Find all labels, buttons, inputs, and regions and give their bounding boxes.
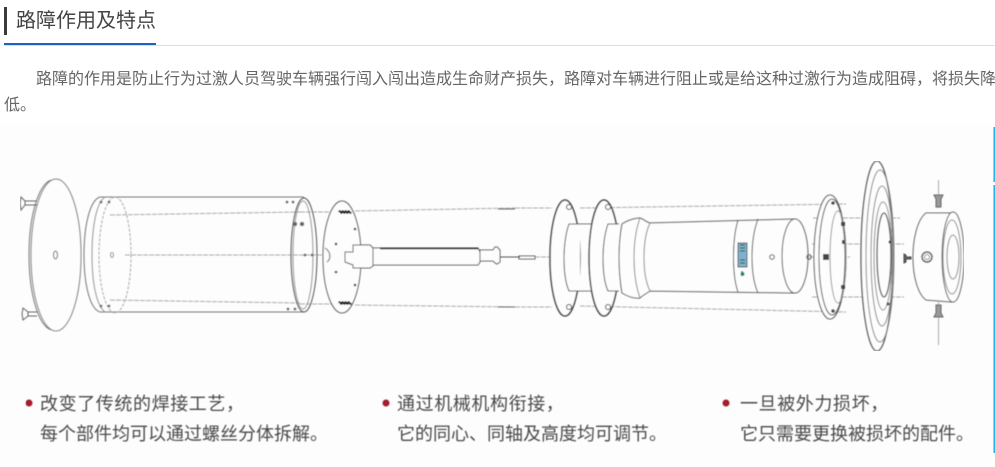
- intro paragraph: 低。: [4, 97, 36, 114]
- part: end cap with screws: [904, 180, 964, 345]
- callout: mechanical linkage: 它的同心、同轴及高度均可调节。: [397, 424, 667, 444]
- part: twin flange: [550, 200, 619, 316]
- callout: replace parts: 它只需要更换被损坏的配件。: [740, 424, 974, 444]
- status label: [738, 243, 747, 267]
- callout: welding process: 改变了传统的焊接工艺，: [40, 394, 245, 414]
- callout: welding process: [26, 394, 328, 444]
- callout: replace parts: [722, 394, 974, 444]
- callout: replace parts: 一旦被外力损坏，: [740, 394, 889, 414]
- diagram drawing: [20, 161, 964, 351]
- part: main cylinder body: [619, 218, 808, 298]
- part: notched mounting plate: [323, 201, 361, 313]
- callouts: [26, 394, 974, 444]
- callout: welding process: 每个部件均可以通过螺丝分体拆解。: [40, 424, 328, 444]
- callout: mechanical linkage: [382, 394, 667, 444]
- guide lines: [110, 204, 904, 312]
- part: end lid with bolts: [20, 179, 81, 331]
- callout: mechanical linkage: 通过机械机构衔接，: [397, 394, 564, 414]
- part: central rod: [345, 209, 535, 307]
- green marker: [740, 271, 744, 276]
- part: large base flange: [861, 161, 894, 351]
- intro paragraph: 路障的作用是防止行为过激人员驾驶车辆强行闯入闯出造成生命财产损失，路障对车辆进行阻止或是给这种过激行为造成阻碍，将损失降: [36, 71, 995, 88]
- title underline: [4, 43, 995, 46]
- right edge blue line: [993, 127, 995, 453]
- part: outer sleeve cylinder: [84, 197, 317, 313]
- part: bolt ring: [807, 195, 846, 319]
- title: 路障作用及特点: [16, 10, 156, 32]
- intro paragraph: [4, 70, 995, 114]
